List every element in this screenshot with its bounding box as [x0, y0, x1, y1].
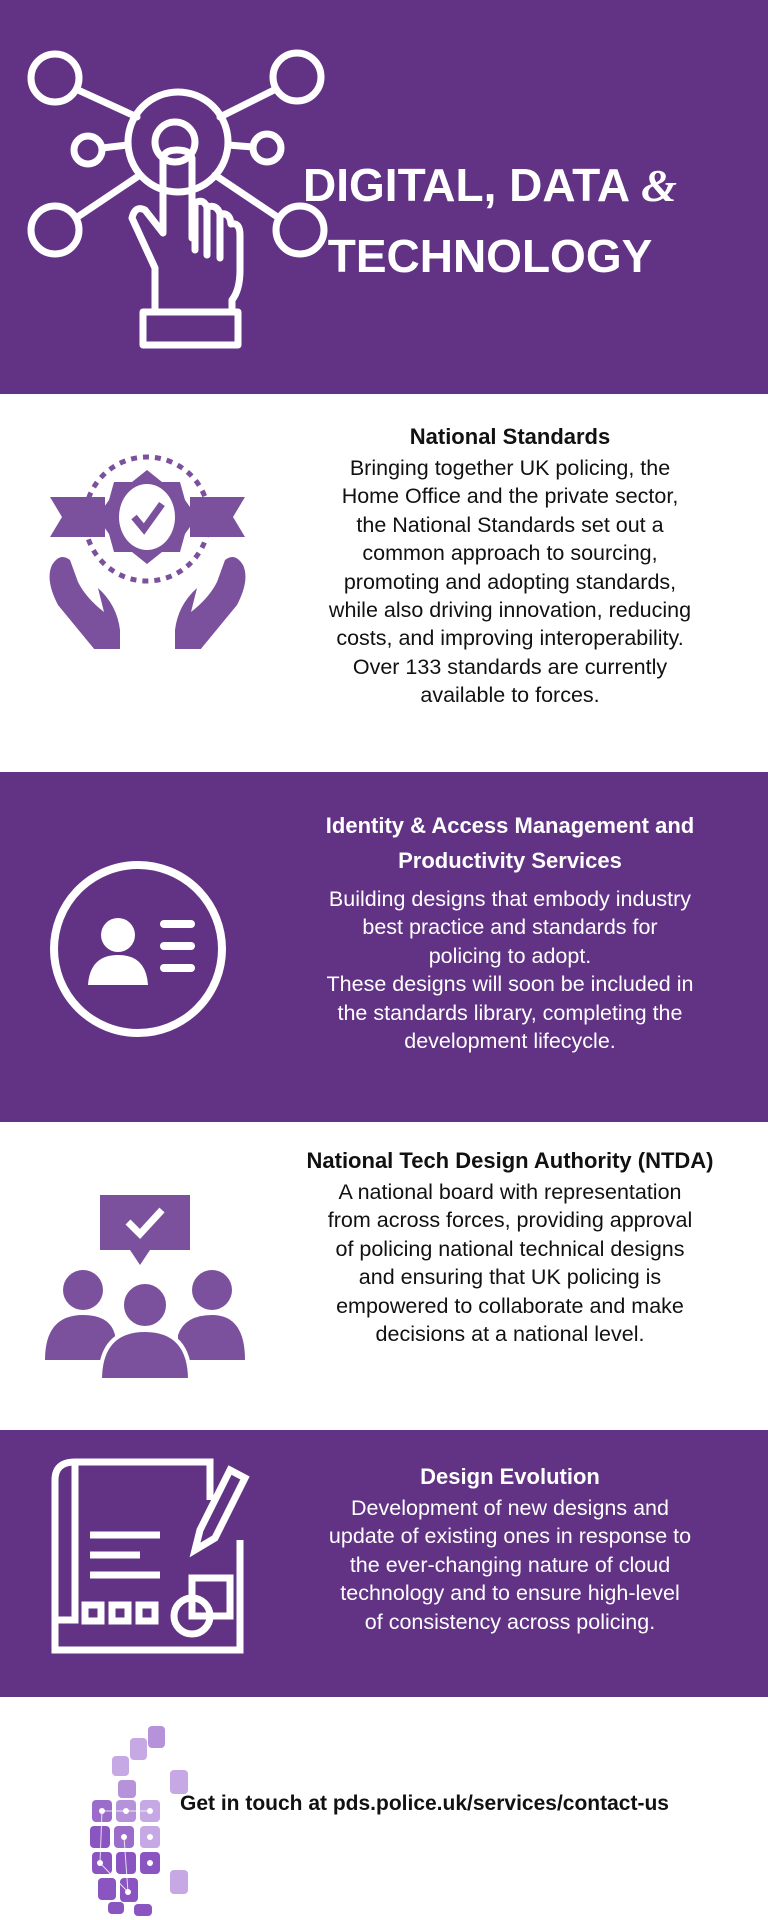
- text: national standards: the National Standards set out a: [356, 513, 664, 537]
- footer: [90, 1726, 669, 1916]
- text: identity & access: development lifecycle.: [404, 1029, 616, 1053]
- text: NTDA: and ensuring that UK policing is: [359, 1265, 661, 1289]
- text: national standards: promoting and adopting standards,: [344, 570, 676, 594]
- text: NTDA: A national board with representation: [338, 1180, 682, 1204]
- text: national standards: available to forces.: [420, 683, 600, 707]
- text: NTDA: empowered to collaborate and make: [336, 1294, 684, 1318]
- icon: group with check bubble: [45, 1195, 245, 1378]
- text: national standards: Over 133 standards are currently: [353, 655, 667, 679]
- text: design evolution: update of existing ones in response to: [329, 1524, 691, 1548]
- panel: national standards: [50, 424, 691, 707]
- text: NTDA: of policing national technical designs: [335, 1237, 684, 1261]
- text: identity & access: Identity & Access Management and: [326, 813, 694, 838]
- text: design evolution: Development of new designs and: [351, 1496, 669, 1520]
- icon: blueprint with pencil: [52, 1458, 250, 1654]
- panel: NTDA: [45, 1148, 714, 1378]
- text: identity & access: [326, 813, 694, 1053]
- text: NTDA: from across forces, providing approval: [328, 1208, 692, 1232]
- text: NTDA: decisions at a national level.: [376, 1322, 644, 1346]
- text: contact: Get in touch at pds.police.uk/services/contact-us: [180, 1792, 669, 1815]
- text: identity & access: policing to adopt.: [429, 944, 591, 968]
- text: design evolution: Design Evolution: [420, 1464, 600, 1489]
- text: NTDA: [306, 1148, 714, 1346]
- icon: profile card: [50, 861, 226, 1037]
- icon: PDS logo: [90, 1726, 188, 1916]
- title: [303, 159, 677, 282]
- text: design evolution: technology and to ensure high-level: [340, 1581, 680, 1605]
- text: national standards: [328, 424, 691, 707]
- text: identity & access: the standards library, completing the: [338, 1001, 682, 1025]
- title: DIGITAL, DATA &: [303, 159, 677, 211]
- icon: hand touching network: [28, 50, 328, 348]
- text: national standards: Bringing together UK policing, the: [350, 456, 670, 480]
- text: identity & access: best practice and standards for: [362, 915, 658, 939]
- title: TECHNOLOGY: [328, 230, 652, 282]
- text: design evolution: the ever-changing nature of cloud: [350, 1553, 670, 1577]
- text: design evolution: of consistency across policing.: [365, 1610, 655, 1634]
- panel: design evolution: [0, 1430, 768, 1697]
- panel: identity & access: [0, 772, 768, 1122]
- text: national standards: Home Office and the private sector,: [342, 484, 678, 508]
- text: national standards: common approach to sourcing,: [362, 541, 658, 565]
- text: national standards: while also driving innovation, reducing: [329, 598, 691, 622]
- text: identity & access: Productivity Services: [398, 848, 622, 873]
- text: design evolution: [329, 1464, 691, 1634]
- icon: badge in hands: [50, 454, 246, 649]
- text: national standards: National Standards: [410, 424, 610, 449]
- text: national standards: costs, and improving interoperability.: [336, 626, 684, 650]
- header panel: [0, 0, 768, 394]
- text: identity & access: Building designs that embody industry: [329, 887, 691, 911]
- text: identity & access: These designs will soon be included in: [327, 972, 693, 996]
- text: NTDA: National Tech Design Authority (NTDA): [306, 1148, 714, 1173]
